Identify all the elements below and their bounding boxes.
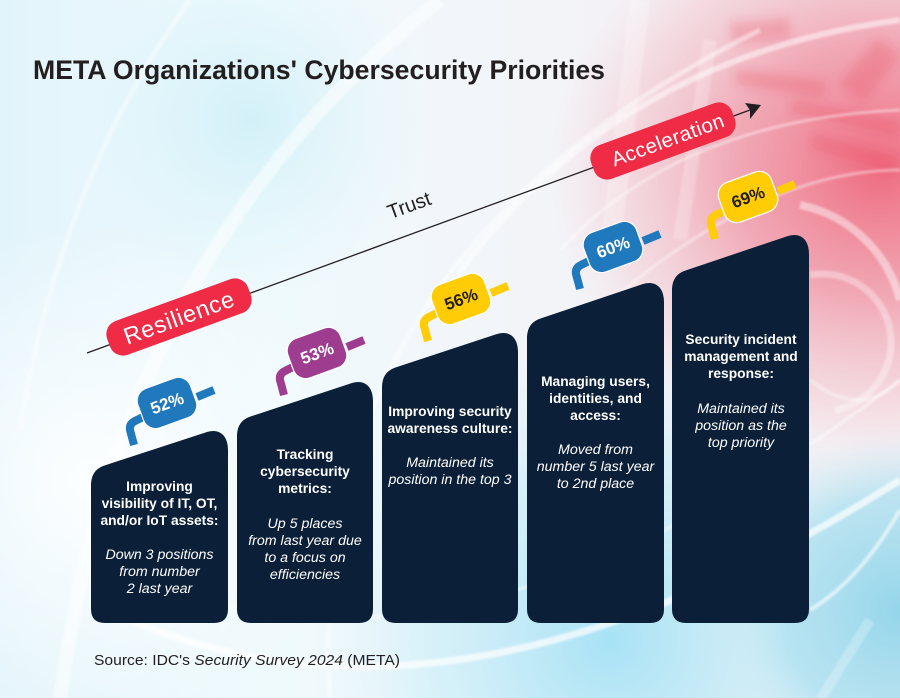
- heading: column 5: management and: [684, 349, 798, 364]
- heading: column 5: response:: [708, 366, 774, 381]
- badge: 56%: 56%: [442, 285, 480, 314]
- description: column 1: from number: [119, 564, 201, 580]
- heading: column 1: Improving: [126, 479, 193, 494]
- label: trust: Trust: [385, 188, 435, 224]
- description: column 4: number 5 last year: [537, 459, 656, 475]
- heading: column 1: visibility of IT, OT,: [102, 496, 217, 511]
- column 1: improving visibility: [91, 431, 228, 623]
- heading: column 4: Managing users,: [541, 374, 650, 389]
- description: column 1: Down 3 positions: [105, 547, 214, 563]
- description: column 2: efficiencies: [270, 567, 340, 583]
- column 4: managing users: [527, 283, 664, 623]
- heading: column 3: awareness culture:: [388, 421, 512, 436]
- heading: column 1: and/or IoT assets:: [100, 513, 219, 528]
- badge: 52%: 52%: [148, 389, 186, 418]
- badge: 53%: [280, 324, 364, 395]
- badge: 69%: 69%: [729, 183, 767, 212]
- badge: 69%: [711, 168, 795, 239]
- description: column 4: to 2nd place: [557, 476, 634, 492]
- pill: resilience: Resilience: [120, 285, 238, 350]
- heading: column 5: Security incident: [685, 332, 797, 347]
- arrow: trust trend line: [87, 103, 761, 353]
- pill: acceleration: Acceleration: [608, 109, 728, 171]
- description: column 3: position in the top 3: [387, 472, 512, 488]
- badge: 52%: [130, 374, 214, 445]
- source note: Source: IDC's Security Survey 2024 (META): [94, 652, 400, 669]
- column 5: incident response: [672, 235, 809, 623]
- badge: 60%: [576, 218, 660, 289]
- heading: column 4: identities, and: [549, 391, 642, 406]
- column 2: tracking metrics: [237, 382, 373, 623]
- column 3: awareness culture: [382, 333, 518, 623]
- description: column 3: Maintained its: [406, 455, 494, 471]
- heading: column 2: cybersecurity: [260, 464, 350, 479]
- badge: 60%: 60%: [594, 233, 632, 262]
- description: column 4: Moved from: [558, 442, 633, 458]
- pill: resilience: [102, 274, 256, 360]
- pill: acceleration: [586, 98, 740, 184]
- description: column 2: from last year due: [248, 533, 362, 549]
- heading: column 3: Improving security: [388, 404, 512, 419]
- description: column 1: 2 last year: [126, 581, 193, 597]
- description: column 5: top priority: [708, 435, 775, 451]
- badge: 56%: [424, 270, 508, 341]
- badge: 53%: 53%: [298, 339, 336, 368]
- description: column 5: Maintained its: [697, 401, 785, 417]
- description: column 2: to a focus on: [264, 550, 346, 566]
- heading: column 2: metrics:: [278, 481, 332, 496]
- title: META Organizations' Cybersecurity Priorities: [33, 55, 605, 85]
- heading: column 4: access:: [570, 408, 621, 423]
- description: column 5: position as the: [694, 418, 787, 434]
- description: column 2: Up 5 places: [268, 516, 342, 532]
- heading: column 2: Tracking: [277, 447, 333, 462]
